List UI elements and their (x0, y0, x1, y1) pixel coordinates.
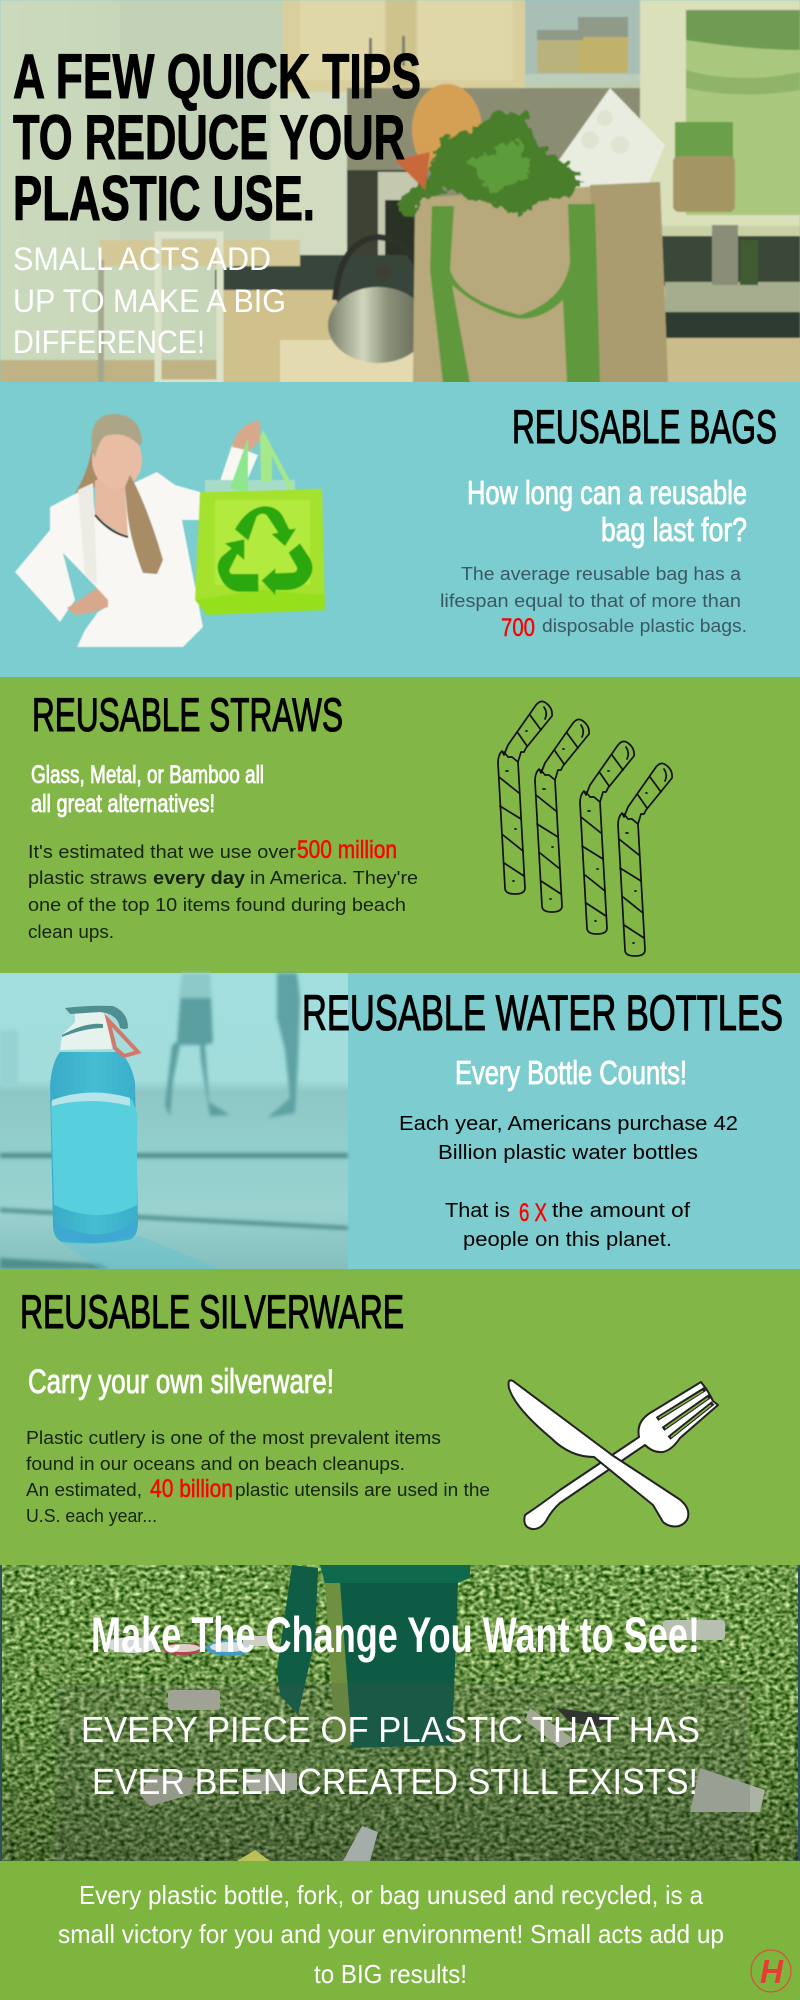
bottles body text: people on this planet. (463, 1228, 672, 1251)
counter bottles (712, 225, 758, 285)
hero title: PLASTIC USE. (13, 164, 315, 234)
shopping bag (413, 182, 668, 383)
bags question (467, 474, 747, 548)
silverware body text: plastic utensils are used in the (235, 1479, 490, 1500)
panel: reusable bags (0, 382, 800, 677)
bags body text: disposable plastic bags. (542, 615, 747, 636)
bags body text: 700 (501, 614, 535, 642)
hero photo background (0, 0, 800, 383)
kettle (328, 237, 428, 363)
straws body text: clean ups. (28, 921, 114, 942)
straws subheading (31, 761, 264, 818)
silverware body text (26, 1427, 490, 1526)
silverware body text: found in our oceans and on beach cleanups. (26, 1453, 405, 1474)
counters (215, 255, 430, 310)
closing text: to BIG results! (314, 1959, 467, 1989)
woman (15, 414, 260, 647)
hero subtitle: UP TO MAKE A BIG (13, 283, 286, 319)
plastic fact: EVERY PIECE OF PLASTIC THAT HAS (81, 1709, 700, 1750)
chair and table (98, 235, 300, 383)
white tray (552, 88, 665, 190)
window (640, 0, 800, 240)
panel: reusable water bottles (0, 973, 800, 1269)
backsplash (347, 88, 640, 238)
bottle reflection (60, 1236, 220, 1269)
straws body text: plastic straws (28, 867, 147, 888)
green bin (277, 1565, 470, 1748)
hero title: A FEW QUICK TIPS (13, 42, 421, 112)
plastic litter (106, 1620, 765, 1861)
plastic fact: EVER BEEN CREATED STILL EXISTS! (92, 1761, 698, 1802)
woman holding recycle bag (15, 414, 325, 647)
icon: straws (498, 701, 672, 956)
closing text: small victory for you and your environment! Small acts add up (58, 1919, 724, 1949)
bread (412, 84, 482, 176)
straws body text: one of the top 10 items found during beach (28, 894, 406, 915)
bottles body text: Billion plastic water bottles (438, 1141, 698, 1164)
panel: reusable straws (0, 677, 800, 973)
bottles body text: Each year, Americans purchase 42 (399, 1112, 738, 1135)
bottles subheading: Every Bottle Counts! (455, 1054, 687, 1091)
silverware body text: 40 billion (150, 1475, 233, 1503)
grass texture (0, 1565, 800, 1861)
panel: make the change photo (0, 1565, 800, 1861)
bags body text: The average reusable bag has a (461, 563, 742, 584)
hero subtitle (13, 241, 286, 360)
knife (508, 1380, 688, 1526)
logo (751, 1950, 791, 1992)
icon: crossed knife and fork (508, 1380, 718, 1529)
silverware body text: Plastic cutlery is one of the most prevalent items (26, 1427, 441, 1448)
recycle symbol (218, 506, 312, 595)
bottles body text: That is (445, 1199, 510, 1222)
straws body text: It's estimated that we use over (28, 841, 296, 862)
logo: H (760, 1953, 784, 1990)
bottle photo (0, 973, 348, 1269)
grass shading (0, 1565, 800, 1861)
panel: reusable silverware (0, 1269, 800, 1565)
water bottle (50, 1006, 138, 1244)
grey overlay band (55, 1683, 750, 1861)
silverware heading: REUSABLE SILVERWARE (20, 1285, 404, 1338)
bottles body text (399, 1112, 738, 1251)
parsley (395, 110, 585, 220)
straws body text: every day (153, 867, 246, 888)
silverware subheading: Carry your own silverware! (28, 1363, 334, 1401)
straws subheading: all great alternatives! (31, 790, 215, 818)
straws heading: REUSABLE STRAWS (32, 688, 343, 741)
panel: hero kitchen photo (0, 0, 800, 383)
basket with grass (673, 122, 735, 212)
shelf with jars (525, 0, 643, 82)
silverware body text: An estimated, (26, 1479, 142, 1500)
blurred runners and planks (0, 973, 348, 1269)
straws body text (28, 836, 418, 942)
recycle bag (195, 430, 325, 615)
hero title (13, 42, 421, 234)
fork (524, 1382, 718, 1529)
straws body text: 500 million (297, 836, 397, 864)
cabinet (283, 0, 525, 92)
hero subtitle: DIFFERENCE! (13, 324, 205, 360)
straws body text: in America. They're (250, 867, 418, 888)
hero title: TO REDUCE YOUR (13, 103, 405, 173)
straws subheading: Glass, Metal, or Bamboo all (31, 761, 264, 789)
plastic fact (81, 1709, 700, 1802)
closing text: Every plastic bottle, fork, or bag unused and recycled, is a (79, 1880, 703, 1910)
closing text (58, 1880, 724, 1989)
bottles body text: 6 X (519, 1199, 547, 1227)
silverware body text: U.S. each year... (26, 1505, 157, 1526)
bags question: bag last for? (601, 511, 747, 548)
panel: closing message (0, 1861, 800, 2000)
bags body text (440, 563, 747, 642)
hero subtitle: SMALL ACTS ADD (13, 241, 271, 277)
bags body text: lifespan equal to that of more than (440, 590, 741, 611)
bottles body text: the amount of (552, 1199, 690, 1222)
